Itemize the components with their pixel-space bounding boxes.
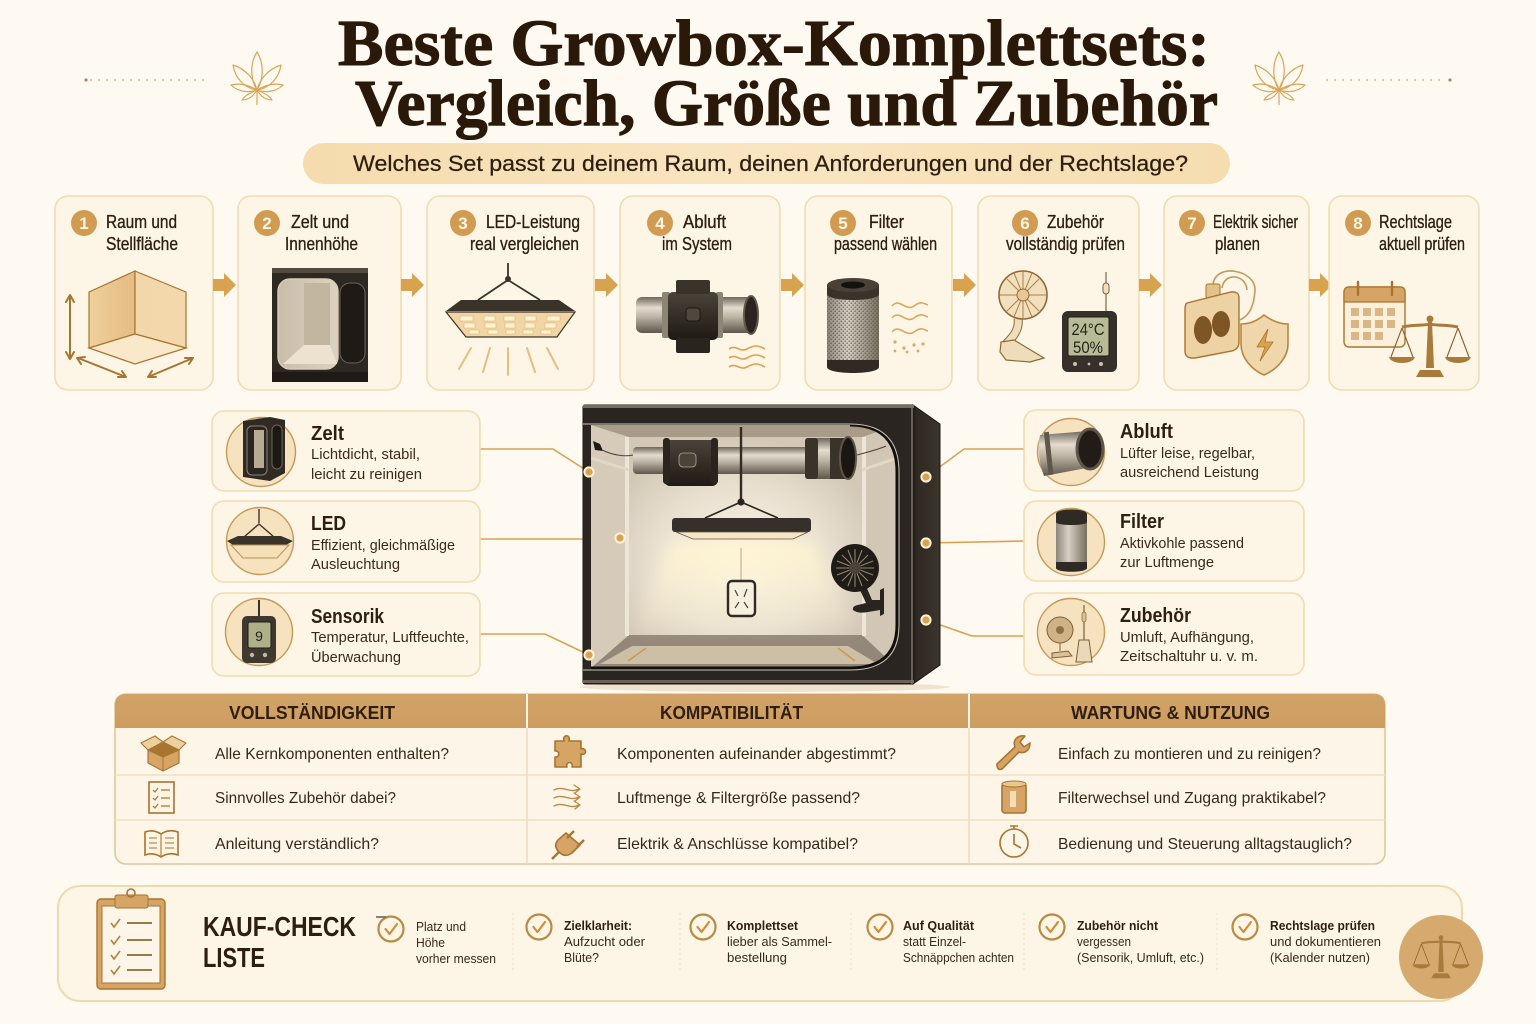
column: Vollständigkeit: Anleitung verständlich? (215, 836, 379, 853)
panel: Abluft: Lüfter leise, regelbar, (1120, 445, 1255, 462)
column: Wartung und Nutzung: WARTUNG & NUTZUNG (1071, 703, 1270, 723)
heading: KAUF-CHECK (203, 911, 356, 942)
panel: Filter: Filter (1120, 511, 1164, 533)
step 6: Zubehör vollständig prüfen: 50% (1073, 338, 1103, 357)
panel: Zelt: leicht zu reinigen (311, 466, 422, 483)
check: Zubehör nicht vergessen: vergessen (1077, 934, 1131, 949)
step 1: Raum und Stellfläche: 1 (79, 214, 89, 233)
check: Platz und Höhe: Platz und (416, 919, 466, 934)
panel: Zelt: Zelt (311, 423, 344, 445)
check: Platz und Höhe: Höhe (416, 935, 445, 950)
step 2: Zelt und Innenhöhe: 2 (262, 214, 272, 233)
check: Komplettset: Komplettset (727, 918, 799, 933)
column: Kompatibilität: Luftmenge & Filtergröße passend? (617, 790, 860, 807)
step 2: Zelt und Innenhöhe: Innenhöhe (285, 233, 358, 254)
step 3: LED-Leistung real vergleichen: LED-Leistung (486, 211, 580, 232)
panel: LED: Effizient, gleichmäßige (311, 537, 455, 554)
column: Kompatibilität: Elektrik & Anschlüsse kompatibel? (617, 836, 858, 853)
step 8: Rechtslage aktuell prüfen: aktuell prüfen (1379, 233, 1465, 254)
central growbox illustration (580, 405, 950, 692)
step 3: LED-Leistung real vergleichen: 3 (458, 214, 468, 233)
check: Platz und Höhe (376, 916, 496, 966)
check: Zubehör nicht vergessen: (Sensorik, Umluft, etc.) (1077, 950, 1204, 965)
column: Vollständigkeit: Sinnvolles Zubehör dabei? (215, 790, 396, 807)
panel: Sensorik: Temperatur, Luftfeuchte, (311, 629, 469, 646)
column: Kompatibilität: Komponenten aufeinander abgestimmt? (617, 746, 896, 763)
check: Auf Qualität (868, 914, 1014, 965)
column: Kompatibilität (552, 703, 896, 859)
panel: Filter (1024, 501, 1304, 581)
arrow 7 to 8 (1309, 273, 1332, 297)
check: Zubehör nicht vergessen: Zubehör nicht (1077, 918, 1159, 933)
step 8: Rechtslage aktuell prüfen: 8 (1353, 214, 1363, 233)
panel: Zelt (212, 411, 480, 491)
check: Rechtslage prüfen (1232, 914, 1381, 965)
step 6: Zubehör vollständig prüfen (978, 196, 1139, 390)
check: Auf Qualität: Auf Qualität (903, 918, 975, 933)
arrow 1 to 2 (213, 273, 236, 297)
panel: LED: Ausleuchtung (311, 556, 400, 573)
check: Rechtslage prüfen: und dokumentieren (1270, 934, 1381, 949)
check: Zielklarheit: Blüte? (564, 950, 599, 965)
title: Beste Growbox-Komplettsets: (338, 7, 1210, 80)
arrow 5 to 6 (953, 273, 976, 297)
panel: Zubehör (1024, 593, 1304, 675)
panel: Sensorik (212, 593, 480, 676)
step 2: Zelt und Innenhöhe (238, 196, 401, 390)
panel: LED: LED (311, 513, 346, 535)
panel: Sensorik: Überwachung (311, 648, 401, 666)
check: Zielklarheit (526, 914, 646, 965)
arrow 6 to 7 (1139, 273, 1162, 297)
panel: Sensorik: 9 (255, 628, 263, 644)
subtitle pill (303, 143, 1230, 184)
panel: Kauf-Check Liste (58, 886, 1462, 1001)
panel: Abluft: ausreichend Leistung (1120, 464, 1259, 481)
step 8: Rechtslage aktuell prüfen: Rechtslage (1379, 211, 1452, 232)
step 5: Filter passend wählen: passend wählen (834, 233, 937, 254)
step 1: Raum und Stellfläche (55, 196, 213, 390)
step 4: Abluft im System: 4 (655, 214, 665, 233)
step 6: Zubehör vollständig prüfen: Zubehör (1047, 211, 1104, 232)
arrow 4 to 5 (781, 273, 804, 297)
step 7: Elektrik sicher planen: 7 (1187, 214, 1197, 233)
title: Vergleich, Größe und Zubehör (355, 67, 1218, 140)
icon: scale badge (1399, 915, 1483, 999)
step 1: Raum und Stellfläche: Stellfläche (106, 233, 178, 254)
heading (203, 911, 356, 973)
panel: Zelt: Lichtdicht, stabil, (311, 446, 420, 463)
icon: right leaf ornament (1253, 52, 1452, 105)
check: Platz und Höhe: vorher messen (416, 951, 496, 966)
check: Zielklarheit: Aufzucht oder (564, 934, 646, 949)
step 8: Rechtslage aktuell prüfen (1329, 196, 1479, 390)
check: Zubehör nicht vergessen (1040, 914, 1204, 965)
check: Rechtslage prüfen: Rechtslage prüfen (1270, 918, 1375, 933)
panel: Sensorik: Sensorik (311, 606, 385, 628)
step 3: LED-Leistung real vergleichen: real vergleichen (470, 233, 579, 254)
panel: Zubehör: Umluft, Aufhängung, (1120, 629, 1254, 646)
panel: Filter: Aktivkohle passend (1120, 535, 1244, 552)
check: Komplettset: lieber als Sammel- (727, 934, 832, 949)
panel: LED (212, 501, 480, 582)
column: Vollständigkeit (141, 703, 449, 857)
step 7: Elektrik sicher planen: planen (1215, 233, 1260, 254)
title (338, 7, 1218, 140)
panel: Zubehör: Zeitschaltuhr u. v. m. (1120, 648, 1258, 665)
comparison table (115, 694, 1385, 864)
panel: Abluft: Abluft (1120, 421, 1173, 443)
column: Kompatibilität: KOMPATIBILITÄT (660, 703, 803, 723)
step 4: Abluft im System (620, 196, 780, 390)
panel: Abluft (1024, 410, 1304, 491)
column: Wartung und Nutzung: Bedienung und Steuerung alltagstauglich? (1058, 836, 1352, 853)
step 5: Filter passend wählen: Filter (869, 211, 904, 232)
step 6: Zubehör vollständig prüfen: 24°C (1072, 320, 1104, 339)
panel: Zubehör: Zubehör (1120, 605, 1191, 627)
arrow 2 to 3 (401, 273, 424, 297)
step 1: Raum und Stellfläche: Raum und (106, 211, 177, 232)
step 7: Elektrik sicher planen (1164, 196, 1309, 390)
subtitle pill: Welches Set passt zu deinem Raum, deinen Anforderungen und der Rechtslage? (353, 151, 1188, 176)
check: Zielklarheit: Zielklarheit: (564, 918, 632, 933)
step 2: Zelt und Innenhöhe: Zelt und (291, 211, 349, 232)
column: Wartung und Nutzung: Einfach zu montieren und zu reinigen? (1058, 746, 1321, 763)
column: Vollständigkeit: VOLLSTÄNDIGKEIT (229, 703, 395, 723)
check: Komplettset (690, 914, 832, 965)
check: Komplettset: bestellung (727, 950, 787, 965)
check: Rechtslage prüfen: (Kalender nutzen) (1270, 950, 1370, 965)
step 5: Filter passend wählen: 5 (838, 214, 848, 233)
step 6: Zubehör vollständig prüfen: 6 (1020, 214, 1030, 233)
heading: LISTE (203, 942, 265, 973)
panel: Filter: zur Luftmenge (1120, 554, 1214, 571)
step 6: Zubehör vollständig prüfen: vollständig prüfen (1006, 233, 1125, 254)
icon: clipboard (97, 889, 165, 989)
check: Auf Qualität: statt Einzel- (903, 934, 966, 949)
step 5: Filter passend wählen (805, 196, 952, 390)
connector lines (480, 449, 1024, 655)
step 7: Elektrik sicher planen: Elektrik sicher (1213, 211, 1298, 232)
column: Wartung und Nutzung: Filterwechsel und Zugang praktikabel? (1058, 790, 1326, 807)
check: Auf Qualität: Schnäppchen achten (903, 950, 1014, 965)
step 3: LED-Leistung real vergleichen (427, 196, 594, 390)
arrow 3 to 4 (595, 273, 618, 297)
step 4: Abluft im System: im System (662, 233, 732, 254)
step 4: Abluft im System: Abluft (683, 211, 726, 232)
column: Vollständigkeit: Alle Kernkomponenten enthalten? (215, 746, 449, 763)
column: Wartung und Nutzung (997, 703, 1352, 857)
icon: left leaf ornament (84, 52, 283, 105)
